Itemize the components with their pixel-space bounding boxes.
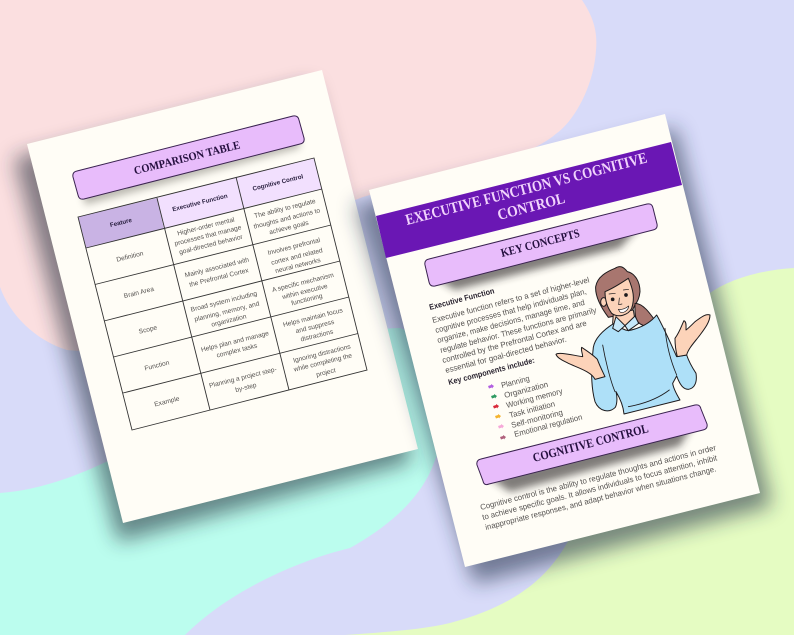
table row labels: Brain Area [123, 286, 155, 300]
table cognitive control column: project [316, 367, 337, 379]
key components list: Self-monitoring [510, 408, 564, 430]
executive function text block: essential for goal-directed behavior. [444, 335, 567, 375]
key components list: Task initiation [508, 399, 556, 420]
table cognitive control column: neural networks [275, 257, 322, 275]
right hand [675, 315, 710, 357]
table grid [78, 158, 367, 430]
table executive function column [174, 216, 277, 394]
table row labels [116, 250, 181, 408]
cognitive control paragraph: inappropriate responses, and adapt behavior when situations change. [484, 464, 717, 532]
facial features [609, 289, 629, 313]
table row labels: Example [154, 395, 181, 408]
sweater [592, 315, 696, 414]
table cognitive control column: cortex and related [271, 247, 324, 267]
table cognitive control column: distractions [300, 328, 335, 343]
table executive function column: complex tasks [216, 342, 259, 359]
executive function text block: cognitive processes that help individuals plan, [434, 287, 587, 335]
heading bar: cognitive control [477, 405, 707, 492]
executive function text block: Executive function refers to a set of higher-level [431, 275, 590, 325]
heading bar: cognitive control: COGNITIVE CONTROL [531, 421, 650, 465]
table header labels: Executive Function [172, 193, 229, 213]
table executive function column: organization [211, 313, 248, 329]
table cognitive control column: thoughts and actions to [253, 207, 321, 231]
table header labels [109, 173, 304, 229]
key components list: Working memory [505, 387, 564, 410]
cognitive control paragraph: to achieve specific goals. It allows individuals to focus attention, inhibit [481, 453, 719, 522]
table cognitive control column: The ability to regulate [254, 198, 317, 220]
table executive function column: by-step [235, 382, 258, 394]
heading bar: key concepts [425, 204, 657, 290]
comparison table [78, 158, 367, 430]
table executive function column: Broad system including [190, 290, 258, 314]
table header cells [78, 158, 322, 248]
title banner: CONTROL [496, 190, 567, 224]
key components list: Emotional regulation [513, 413, 583, 439]
table header labels: Cognitive Control [252, 173, 304, 193]
table executive function column: planning, memory, and [194, 300, 260, 323]
table executive function column: Helps plan and manage [200, 330, 270, 354]
table executive function column: Mainly associated with [184, 257, 250, 279]
table cognitive control column: within executive [281, 283, 329, 301]
cognitive control paragraph: Cognitive control is the ability to regulate thoughts and actions in order [479, 443, 717, 512]
table row labels: Scope [138, 324, 158, 336]
key components list: Organization [503, 380, 549, 400]
table cognitive control column: and suppress [295, 319, 336, 335]
heading bar: key concepts: KEY CONCEPTS [499, 226, 581, 260]
table row labels: Definition [116, 250, 145, 264]
shirt collar [613, 316, 639, 332]
executive function text block: controlled by the Prefrontal Cortex and are [441, 319, 588, 365]
executive function text block: Executive Function [428, 286, 495, 312]
left hand [556, 347, 605, 379]
table cognitive control column: achieve goals [269, 220, 310, 236]
table executive function column: processes that manage [174, 224, 242, 248]
sweater folds [603, 328, 677, 407]
table cognitive control column: while completing the [292, 352, 353, 374]
table cognitive control column: Ignoring distractions [293, 343, 352, 365]
ponytail [635, 303, 658, 327]
illustration: woman shrugging [556, 267, 710, 414]
table executive function column: Higher-order mental [177, 216, 236, 237]
heading bar: comparison table: COMPARISON TABLE [133, 139, 242, 177]
table cognitive control column: Involves prefrontal [267, 237, 321, 257]
panel: key concepts page [355, 114, 772, 584]
title banner [376, 142, 682, 258]
table header labels: Feature [109, 217, 133, 229]
panel: comparison table page [14, 70, 418, 542]
table executive function column: Planning a project step- [209, 366, 277, 390]
face [605, 278, 633, 316]
key components list: Planning [500, 374, 531, 390]
table row labels: Function [144, 359, 170, 372]
ear [601, 298, 607, 306]
heading bar: comparison table [73, 116, 304, 205]
key components list [488, 374, 583, 440]
hair back [596, 267, 640, 317]
executive function text block: Key components include: [447, 356, 536, 387]
executive function text block: regulate behavior. These functions are primarily [439, 306, 597, 355]
title banner: EXECUTIVE FUNCTION VS COGNITIVE [404, 150, 649, 229]
executive function text block: organize, make decisions, manage time, and [436, 298, 586, 345]
table cognitive control column: Helps maintain focus [282, 307, 344, 329]
executive function text block [428, 275, 597, 387]
table cognitive control column [253, 198, 353, 379]
table cognitive control column: functioning [291, 293, 324, 307]
neck [613, 310, 635, 328]
table executive function column: goal-directed behavior [178, 234, 244, 256]
list arrow bullets [488, 384, 506, 440]
table executive function column: the Prefrontal Cortex [189, 267, 250, 289]
table cognitive control column: A specific mechanism [271, 272, 335, 294]
